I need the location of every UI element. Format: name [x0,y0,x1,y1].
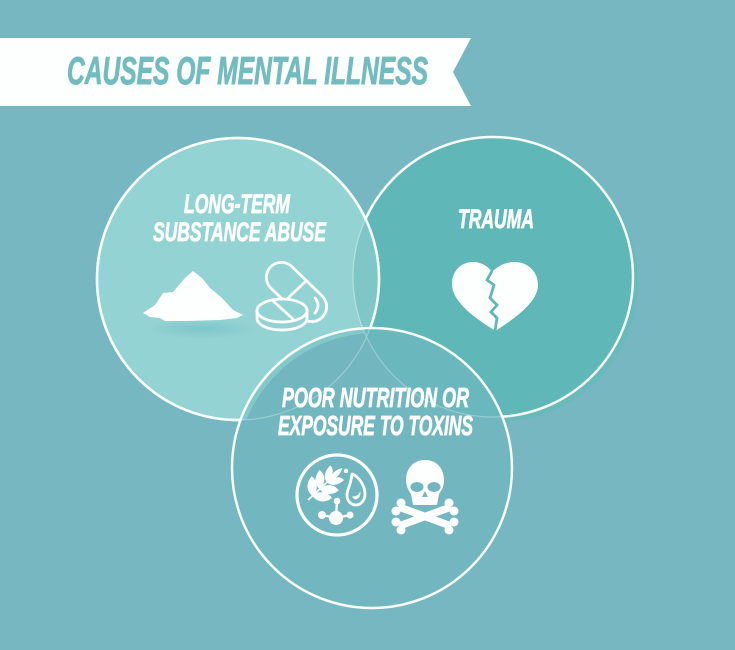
heading: poor nutrition or exposure to toxins: POOR NUTRITION OR [282,382,469,413]
heading: long-term substance abuse [153,189,327,247]
panel: substance abuse circle [96,136,380,422]
panel: poor nutrition or toxins circle [230,326,514,610]
icon: skull and crossbones [392,460,458,534]
heading: long-term substance abuse: LONG-TERM [184,189,290,219]
heading: long-term substance abuse: SUBSTANCE ABUSE [153,217,327,247]
band overlapping substance circle [242,330,454,420]
panel: trauma circle [353,137,638,422]
heading: poor nutrition or exposure to toxins: EXPOSURE TO TOXINS [278,410,473,441]
heading: trauma: TRAUMA [458,204,534,234]
icon: nutrition circle [297,455,377,535]
wheat [298,457,353,511]
shifted fill of the bottom circle [242,329,501,420]
icon: broken heart [452,262,538,331]
icon: powder pile [143,271,258,339]
molecule [318,498,354,525]
droplet [347,474,365,505]
heading: poor nutrition or exposure to toxins [278,382,473,441]
title banner [0,38,471,106]
title: CAUSES OF MENTAL ILLNESS [67,50,428,93]
icon: pills [257,262,327,330]
overlap of substance and trauma circles [353,221,378,327]
